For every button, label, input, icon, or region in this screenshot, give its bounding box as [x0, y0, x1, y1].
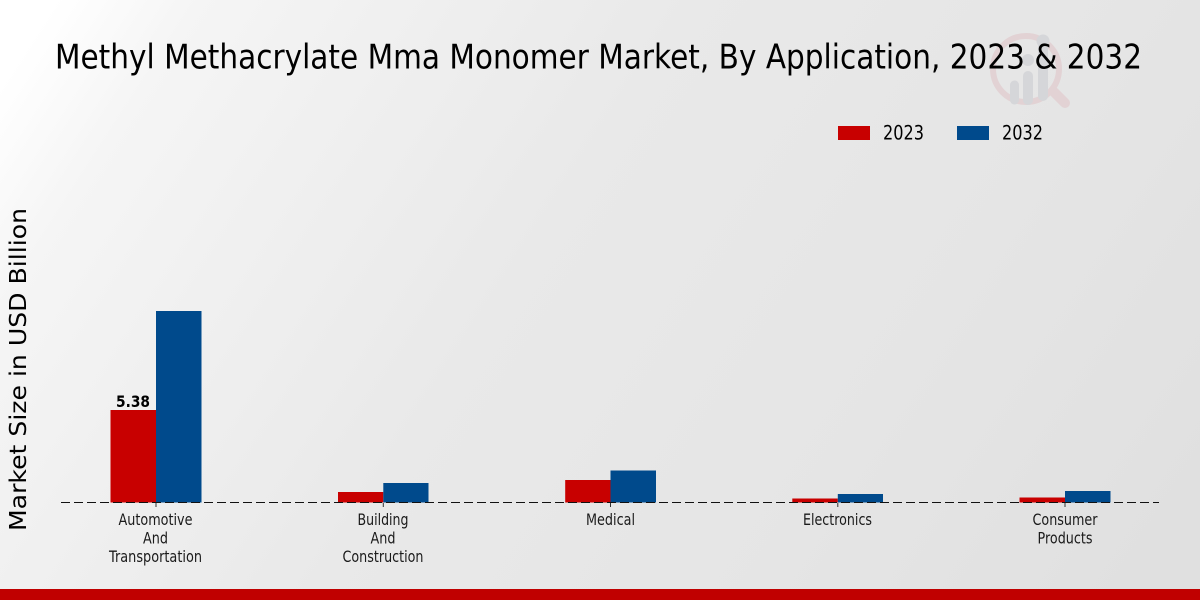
icon: watermark magnifier logo [993, 34, 1065, 103]
group: Automotive And Transportation [110, 311, 202, 502]
legend label: 2032: 2032 [1002, 122, 1043, 144]
data label: 5.38: 5.38 [116, 392, 150, 411]
legend label: 2023: 2023 [883, 122, 924, 144]
baseline [61, 502, 1159, 504]
label: Automotive And Transportation: Automotive [118, 510, 192, 529]
legend [838, 122, 1043, 144]
label: Building And Construction: Building [358, 510, 408, 529]
bar chart [110, 311, 1110, 502]
label: Automotive And Transportation [108, 510, 202, 566]
group: Electronics [792, 494, 883, 502]
x axis labels [108, 510, 1098, 566]
label: Building And Construction: Construction [342, 547, 424, 566]
label: Building And Construction [342, 510, 424, 566]
label: Building And Construction: And [370, 528, 396, 548]
group: Consumer Products [1020, 491, 1110, 502]
label: Automotive And Transportation: And [143, 528, 168, 548]
legend swatch: 2023 [838, 126, 870, 140]
label: Consumer Products: Consumer [1032, 510, 1098, 529]
group: Medical [565, 470, 656, 502]
footer bar [0, 589, 1200, 600]
label: Automotive And Transportation: Transportation [108, 547, 202, 566]
label: Consumer Products: Products [1038, 528, 1092, 548]
label: Consumer Products [1032, 510, 1098, 548]
label: Electronics: Electronics [803, 510, 872, 529]
y axis title: Market Size in USD Billion [6, 208, 32, 531]
legend swatch: 2032 [957, 126, 989, 140]
label: Medical: Medical [586, 510, 635, 529]
group: Building And Construction [338, 483, 428, 502]
